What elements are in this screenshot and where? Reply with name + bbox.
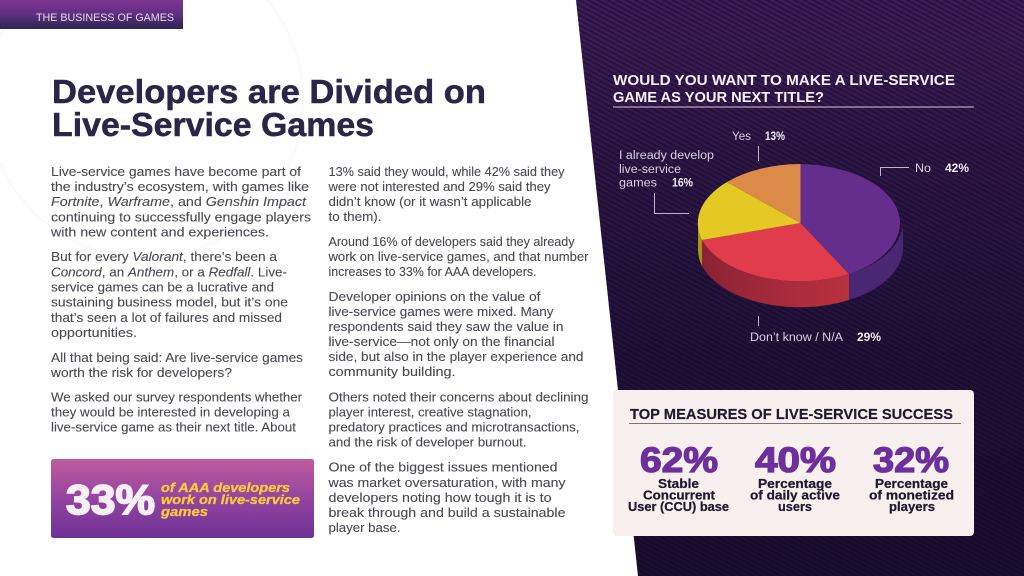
- callout text: work on live-service: [161, 492, 300, 507]
- text block: right column: Developer opinions on the value of: [328, 289, 541, 304]
- stat: 32%: players: [889, 500, 935, 514]
- text block: left column: sustaining business model, but it’s one: [51, 294, 288, 310]
- text block: left column: they would be interested in developing a: [51, 404, 291, 420]
- 3D pie chart: [698, 164, 903, 307]
- pie label: Yes: Yes: [732, 131, 751, 143]
- callout text: of AAA developers: [161, 480, 290, 495]
- text block: right column: to them).: [328, 209, 382, 224]
- text block: left column: that’s seen a lot of failures and missed: [51, 310, 282, 325]
- text block: right column: respondents said they saw the value in: [328, 319, 564, 334]
- callout: 33% of AAA developers: [51, 459, 314, 538]
- pie side walls: [698, 223, 903, 307]
- stat: 62%: Concurrent: [643, 488, 716, 502]
- text block: right column: player base.: [328, 520, 400, 535]
- section tag: THE BUSINESS OF GAMES: [36, 12, 174, 24]
- panel: dark striped background: [576, 0, 1024, 576]
- stat: 62%: 62%: [640, 441, 718, 480]
- text block: right column: increases to 33% for AAA developers.: [328, 264, 536, 279]
- text block: right column: live-service—not only on the financial: [328, 334, 555, 349]
- text block: right column: community building.: [328, 364, 456, 379]
- text block: left column: All that being said: Are live-service games: [51, 350, 304, 365]
- stat: 62%: [628, 441, 729, 514]
- text block: left column: live-service game as their next title. About: [51, 420, 296, 434]
- stat: 40%: [750, 441, 840, 514]
- text block: right column: break through and build a sustainable: [328, 505, 566, 520]
- chart heading: WOULD YOU WANT TO MAKE A LIVE-SERVICE: [613, 73, 955, 89]
- pie label: Yes: [732, 131, 785, 161]
- stat: 32%: [869, 441, 954, 514]
- stat: 32%: Percentage: [875, 477, 948, 491]
- section tag: [0, 0, 183, 29]
- text block: right column: side, but also in the player experience and: [328, 349, 584, 364]
- stat: 40%: users: [778, 500, 812, 514]
- pie label: I already develop: [619, 150, 714, 214]
- title: [52, 73, 486, 143]
- pie label: No: No: [915, 163, 931, 175]
- pie label: No: 42%: [945, 163, 969, 175]
- text block: right column: didn’t know (or it wasn’t applicable: [328, 194, 532, 209]
- text block: right column: developers noting how tough it is to: [328, 490, 552, 505]
- text block: left column: We asked our survey respondents whether: [51, 390, 303, 404]
- text block: left column: Fortnite , Warframe , and Genshin Impact: [51, 194, 308, 209]
- stat: 62%: User (CCU) base: [628, 500, 729, 514]
- text block: left column: [50, 164, 312, 434]
- chart heading: [613, 73, 974, 108]
- text block: right column: live-service games were mixed. Many: [328, 304, 554, 319]
- text block: left column: service games can be a lucrative and: [51, 280, 274, 294]
- slice: already develop 16%: [698, 182, 800, 240]
- title: Live-Service Games: [52, 106, 374, 143]
- text block: left column: But for every Valorant, there’s been a: [51, 249, 278, 264]
- callout number: 33%: [66, 476, 155, 523]
- text block: right column: Others noted their concerns about declining: [328, 390, 588, 404]
- stat: 40%: Percentage: [758, 477, 832, 491]
- pie label: I already develop: live-service: [619, 164, 681, 176]
- stat: 32%: 32%: [873, 441, 949, 480]
- stat: 62%: Stable: [658, 477, 699, 491]
- text block: right column: predatory practices and microtransactions,: [328, 420, 580, 434]
- text block: right column: 13% said they would, while 42% said they: [328, 164, 565, 179]
- pie label: Don't know: 29%: [857, 332, 881, 344]
- pie label: I already develop: 16%: [672, 178, 693, 190]
- callout text: [160, 480, 300, 519]
- text block: left column: opportunities.: [51, 325, 137, 340]
- text block: left column: with new content and experiences.: [50, 224, 269, 240]
- text block: left column: the industry’s ecosystem, with games like: [51, 179, 309, 194]
- stat: 40%: of daily active: [750, 488, 840, 502]
- text block: right column: One of the biggest issues mentioned: [328, 460, 558, 474]
- pie label: No: [880, 163, 969, 176]
- text block: right column: player interest, creative stagnation,: [328, 404, 532, 420]
- text block: left column: worth the risk for developers?: [50, 365, 232, 380]
- pie label: I already develop: games: [619, 178, 657, 190]
- text block: left column: continuing to successfully engage players: [51, 210, 312, 224]
- text block: right column: was market oversaturation, with many: [327, 475, 566, 490]
- text block: right column: [327, 164, 589, 535]
- slice: No 42%: [800, 164, 900, 274]
- callout text: games: [160, 504, 208, 519]
- text block: left column: Live-service games have become part of: [51, 164, 301, 179]
- text block: left column: Concord, an Anthem, or a Redfall. Live-: [51, 264, 287, 280]
- text block: right column: were not interested and 29% said they: [327, 179, 551, 194]
- panel heading: TOP MEASURES OF LIVE-SERVICE SUCCESS: [630, 406, 953, 423]
- text block: right column: work on live-service games, and that number: [327, 249, 589, 264]
- title: Developers are Divided on: [52, 73, 486, 110]
- text block: right column: Around 16% of developers said they already: [328, 234, 575, 249]
- stat: 32%: of monetized: [869, 488, 954, 502]
- stat: 40%: 40%: [755, 441, 836, 480]
- pie label: Yes: 13%: [765, 131, 785, 143]
- slice: Don't know 29%: [702, 223, 849, 281]
- pie label: Don't know: Don’t know / N/A: [750, 332, 843, 344]
- pie label: I already develop: I already develop: [619, 150, 714, 162]
- chart heading: GAME AS YOUR NEXT TITLE?: [613, 90, 824, 106]
- panel: top measures of live-service success: [613, 390, 974, 536]
- text block: right column: and the risk of developer burnout.: [328, 434, 526, 450]
- slice: Yes 13%: [727, 164, 800, 223]
- pie label: Don't know: [750, 316, 881, 344]
